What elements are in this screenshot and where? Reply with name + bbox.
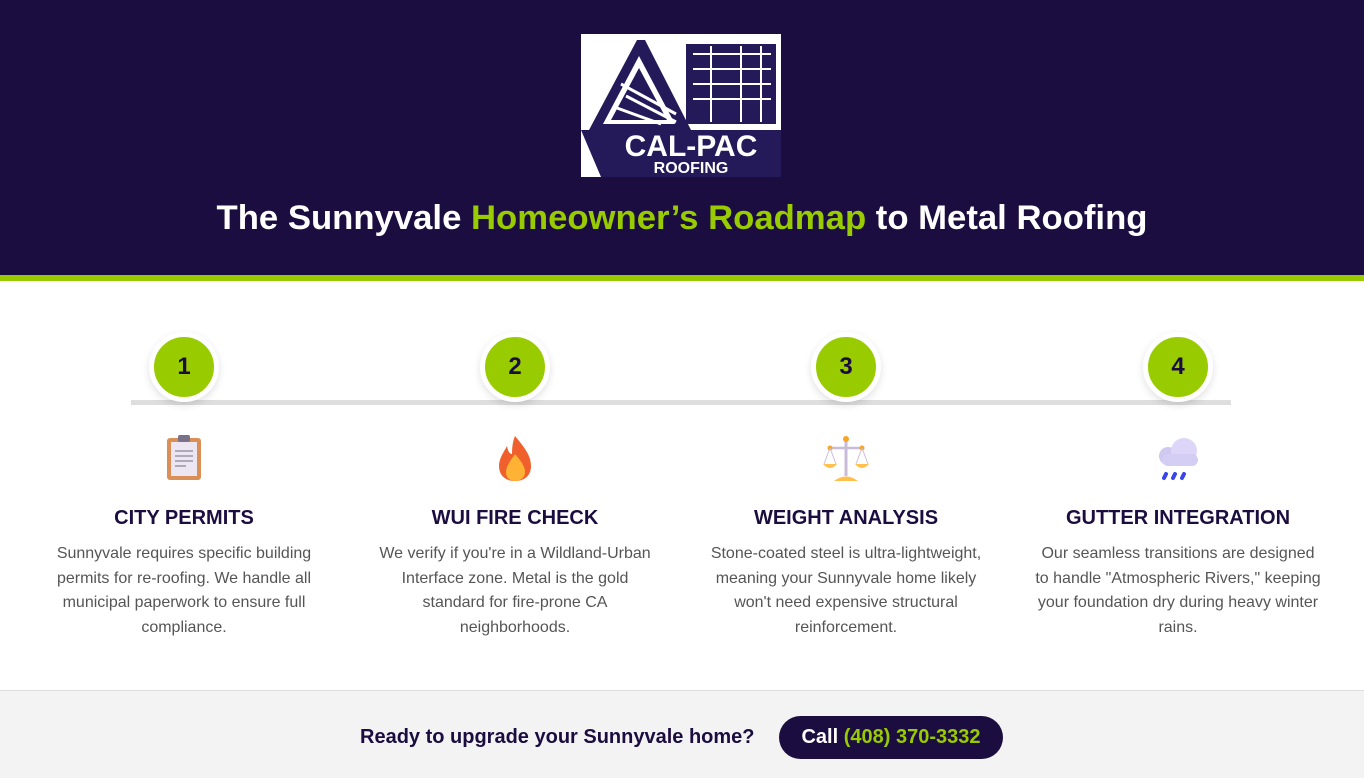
panel: wui fire check [379, 436, 651, 636]
panel: city permits: Sunnyvale requires specific building permits for re-roofing. We handle all municipal paperwork to ensure full compliance. [57, 545, 311, 636]
panel: weight analysis [711, 436, 981, 636]
title: The Sunnyvale Homeowner’s Roadmap to Metal Roofing [217, 199, 1147, 237]
step circle 2: 2 [508, 353, 522, 380]
panel: weight analysis: Stone-coated steel is ultra-lightweight, meaning your Sunnyvale home likely won't need expensive structural reinforcement. [711, 545, 981, 636]
panel: wui fire check: WUI FIRE CHECK [432, 507, 598, 529]
timeline line [131, 400, 1231, 405]
step circle 1 [149, 332, 219, 402]
panel: gutter integration: GUTTER INTEGRATION [1066, 507, 1290, 529]
call button: Call (408) 370-3332 [801, 726, 981, 748]
panel: weight analysis: WEIGHT ANALYSIS [754, 507, 938, 529]
logo: CAL-PAC [625, 130, 757, 163]
header [0, 0, 1364, 275]
step circle 3: 3 [839, 353, 853, 380]
step circle 2 [480, 332, 550, 402]
panel: city permits [57, 435, 311, 636]
footer [0, 690, 1364, 778]
step circle 4 [1143, 332, 1213, 402]
logo: ROOFING [654, 160, 728, 177]
panel: wui fire check: We verify if you're in a Wildland-Urban Interface zone. Metal is the gold standard for fire-prone CA neighborhoods. [379, 545, 651, 636]
call button [779, 716, 1003, 759]
step circle 1: 1 [177, 353, 191, 380]
icon: fire [499, 436, 531, 481]
icon: clipboard [167, 435, 201, 480]
logo [581, 34, 781, 177]
step circle 4: 4 [1171, 353, 1185, 380]
step circle 3 [811, 332, 881, 402]
panel: gutter integration [1035, 438, 1321, 636]
panel: city permits: CITY PERMITS [114, 507, 254, 529]
icon: scales [823, 436, 869, 481]
panel: gutter integration: Our seamless transitions are designed to handle "Atmospheric Rivers," keeping your foundation dry during heavy winter rains. [1035, 545, 1321, 636]
icon: rain cloud [1159, 438, 1198, 480]
footer text: Ready to upgrade your Sunnyvale home? [360, 726, 755, 748]
